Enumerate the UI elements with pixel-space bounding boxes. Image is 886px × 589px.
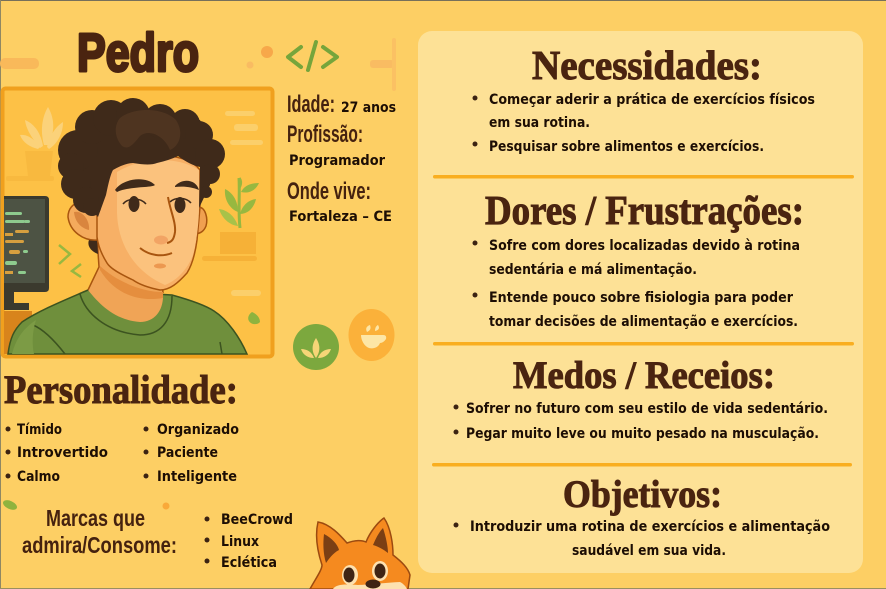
panel: right column	[418, 31, 863, 573]
list: brands: BeeCrowd	[221, 512, 293, 528]
decorative dots	[246, 46, 273, 68]
list: fears: Pegar muito leve ou muito pesado na musculação.	[466, 426, 819, 442]
faded streaks	[6, 111, 263, 296]
list: pains: sedentária e má alimentação.	[489, 262, 697, 278]
list: personality traits: Inteligente	[157, 469, 237, 485]
age: 27 anos	[341, 100, 396, 116]
plant right	[202, 177, 259, 261]
hair	[58, 98, 225, 217]
age: Idade:	[287, 91, 335, 118]
face shading	[117, 160, 199, 285]
profession: Profissão:	[287, 121, 363, 148]
location	[287, 178, 392, 225]
list: personality traits	[6, 422, 239, 485]
neck shadow	[100, 266, 163, 299]
profession	[287, 121, 386, 169]
icon: code tag	[288, 42, 337, 70]
list: needs: em sua rotina.	[489, 115, 590, 131]
heading: brands: Marcas que	[46, 505, 145, 531]
facial features	[115, 179, 199, 268]
list: pains	[472, 238, 800, 330]
list: brands: Eclética	[221, 555, 277, 571]
list: needs: Começar aderir a prática de exercícios físicos	[489, 92, 815, 108]
list: personality traits: Organizado	[157, 422, 239, 438]
list: personality traits: Tímido	[17, 422, 62, 438]
list: personality traits: Calmo	[17, 469, 60, 485]
list: brands: Linux	[221, 534, 260, 550]
ears	[68, 201, 207, 240]
heading: brands	[22, 505, 177, 558]
neck	[88, 237, 163, 322]
portrait illustration	[2, 88, 272, 356]
list: personality traits: Introvertido	[17, 445, 108, 461]
heading: Objetivos: Objetivos:	[563, 473, 722, 516]
list: goals	[454, 519, 830, 559]
list: goals: Introduzir uma rotina de exercícios e alimentação	[470, 519, 830, 535]
list: brands	[204, 512, 293, 571]
heading: Necessidades: Necessidades:	[532, 42, 762, 88]
list: needs	[472, 92, 815, 155]
section: Necessidades	[472, 42, 815, 155]
monitor with code	[4, 196, 49, 354]
profile facts	[287, 91, 396, 225]
list: goals: saudável em sua vida.	[572, 543, 726, 559]
list: pains: tomar decisões de alimentação e exercícios.	[489, 314, 798, 330]
location: Fortaleza – CE	[289, 209, 392, 225]
icon: green leaf badge	[293, 324, 339, 370]
list: needs: Pesquisar sobre alimentos e exercícios.	[489, 139, 764, 155]
list: pains: Entende pouco sobre fisiologia para poder	[489, 290, 794, 306]
age	[287, 91, 396, 118]
section: Medos / Receios	[454, 354, 828, 442]
heading: Dores / Frustrações: Dores / Frustrações:	[485, 187, 804, 233]
shirt	[8, 290, 247, 354]
fox mascot	[310, 518, 410, 589]
heading: brands: admira/Consome:	[22, 532, 177, 558]
face	[97, 156, 200, 290]
location: Onde vive:	[287, 178, 371, 205]
list: personality traits: Paciente	[157, 445, 218, 461]
section: Objetivos	[454, 473, 830, 559]
decorative bar left	[0, 58, 39, 69]
decorative T shape right	[370, 38, 396, 91]
decorative leaf and dot	[2, 498, 169, 512]
faded plant left	[20, 107, 63, 176]
heading: Personalidade: Personalidade:	[4, 367, 238, 412]
icon: orange cup badge	[348, 309, 394, 361]
list: fears	[454, 401, 828, 442]
back hair at neck	[88, 238, 98, 254]
list: pains: Sofre com dores localizadas devido à rotina	[489, 238, 800, 254]
hair highlight	[116, 110, 180, 150]
heading: Medos / Receios: Medos / Receios:	[513, 354, 775, 397]
list: fears: Sofrer no futuro com seu estilo de vida sedentário.	[466, 401, 828, 417]
green leaf spot	[248, 312, 260, 324]
section: Dores / Frustrações	[472, 187, 804, 330]
profession: Programador	[289, 153, 386, 169]
code chevrons	[59, 245, 81, 277]
title: Pedro: Pedro	[77, 23, 199, 83]
